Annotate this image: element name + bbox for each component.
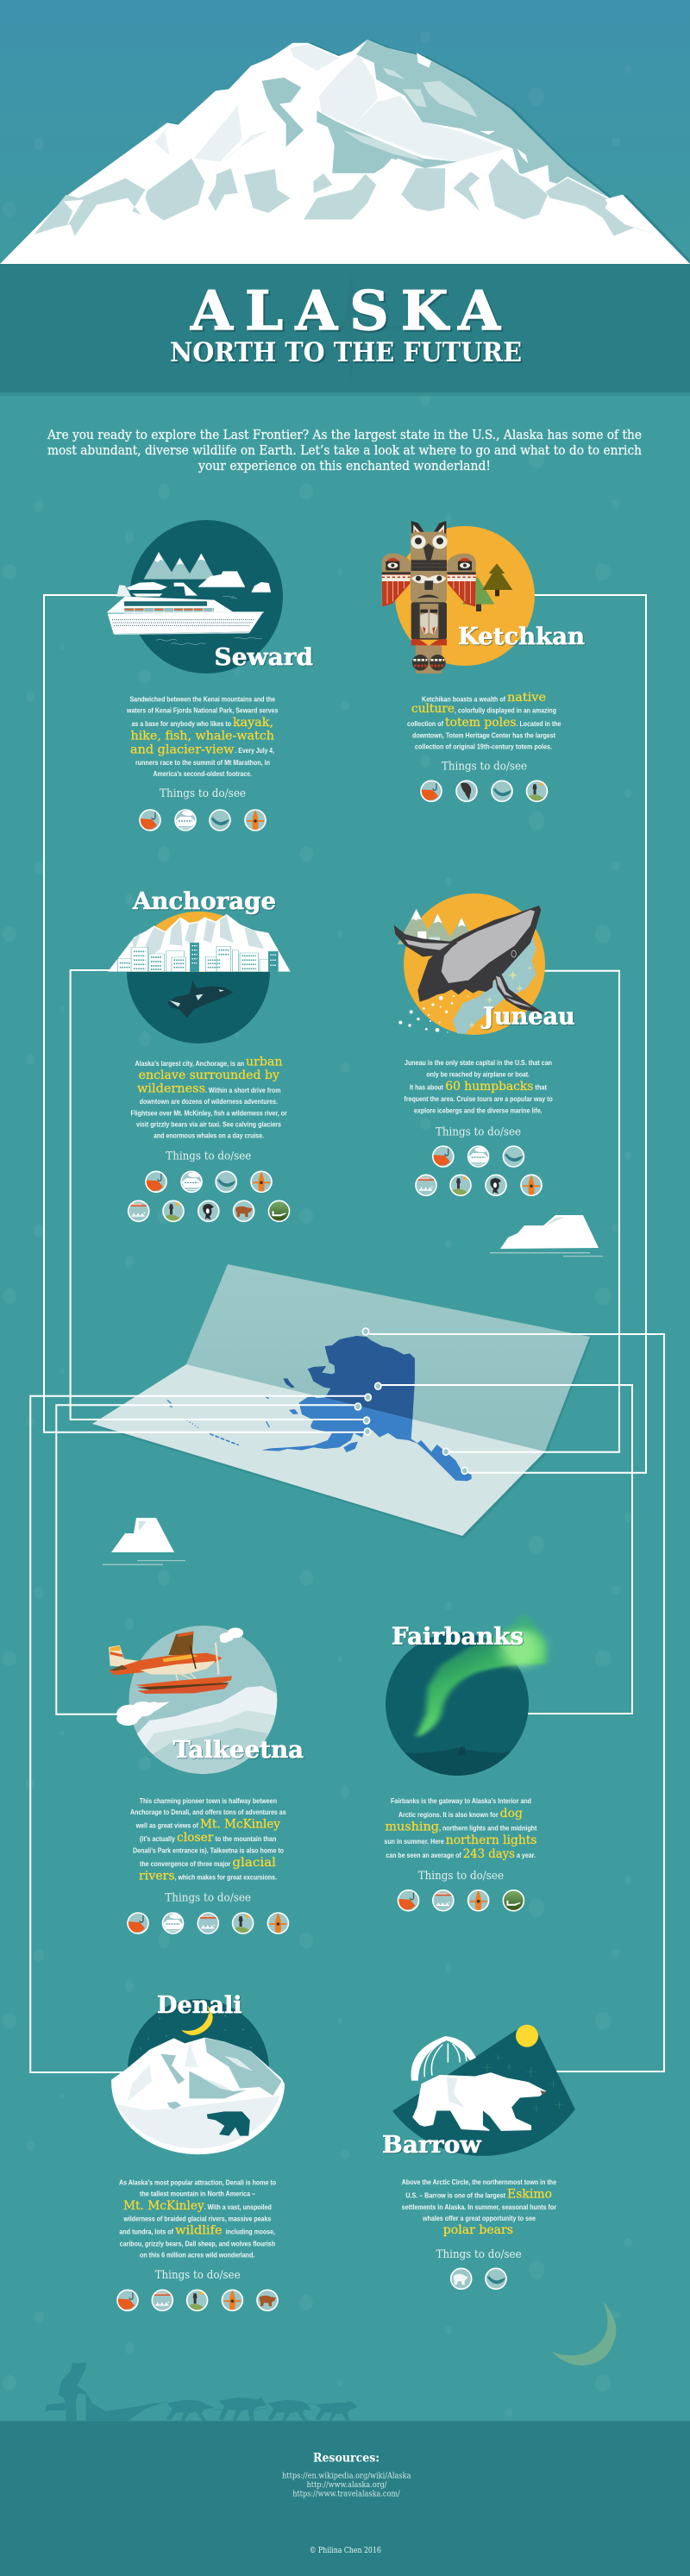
Alaska shape: [167, 1336, 472, 1481]
illustration: northern lights: [386, 1613, 546, 1777]
text block: Seward: as a base for anybody who likes to: [131, 719, 231, 728]
panel: Fairbanks: [384, 1613, 546, 1912]
heading: things to do: Things to do/see: [442, 761, 527, 773]
text block: Ketchikan: totem poles: [445, 716, 516, 730]
text block: Fairbanks: dog: [500, 1807, 523, 1821]
text block: Seward: kayak,: [233, 716, 273, 730]
text block: Seward: America’s second-oldest footrace.: [154, 769, 252, 778]
text block: Talkeetna: rivers: [139, 1870, 175, 1883]
city name: Talkeetna: Talkeetna: [172, 1737, 304, 1764]
text block: Anchorage: . Within a short drive from: [205, 1086, 281, 1094]
text block: Fairbanks: Fairbanks is the gateway to Alaska’s Interior and: [391, 1796, 531, 1805]
heading: things to do: Things to do/see: [160, 787, 246, 800]
text block: Talkeetna: Mt. McKinley: [200, 1817, 280, 1831]
text block: Talkeetna: to the mountain than: [216, 1834, 276, 1843]
icon: compass: [296, 273, 406, 383]
text block: Anchorage: enclave surrounded by: [139, 1069, 279, 1082]
illustration: polar bear: [392, 2025, 575, 2156]
text block: Denali: and tundra, lots of: [119, 2228, 173, 2236]
panel: Barrow: [382, 2025, 575, 2289]
text block: Denali: As Alaska’s most popular attraction, Denali is home to: [119, 2178, 276, 2187]
intro text: most abundant, diverse wildlife on Earth. Let’s take a look at where to go and what to do to enrich: [47, 444, 642, 458]
text block: Denali: [119, 2178, 276, 2259]
text block: Talkeetna: [130, 1796, 286, 1883]
text block: Juneau: [404, 1058, 553, 1114]
icon: iceberg top right: [490, 1215, 603, 1257]
intro text: Are you ready to explore the Last Frontier? As the largest state in the U.S., Alaska has some of the: [47, 429, 642, 442]
resources links: https://en.wikipedia.org/wiki/Alaska: [282, 2472, 411, 2480]
panel: Ketchikan: [382, 521, 585, 801]
text block: Denali: . With a vast, unspoiled: [204, 2203, 272, 2211]
text block: Juneau: only be reached by airplane or boat.: [426, 1069, 530, 1078]
illustration: seaplane: [109, 1626, 282, 1777]
text block: Talkeetna: Anchorage to Denali, and offers tons of adventures as: [130, 1808, 286, 1816]
text block: Seward: waters of Kenai Fjords National Park, Seward serves: [126, 705, 279, 714]
text block: Talkeetna: closer: [177, 1831, 214, 1845]
text block: Barrow: Eskimo: [507, 2187, 552, 2201]
icons: Seward activities: [139, 810, 266, 831]
icons: Talkeetna activities: [127, 1913, 288, 1934]
text block: Barrow: polar bears: [443, 2223, 513, 2237]
panel: Seward: [107, 520, 313, 831]
subtitle: NORTH TO THE FUTURE: [170, 337, 522, 368]
text block: Seward: . Every July 4,: [235, 746, 274, 755]
text block: Fairbanks: [384, 1796, 537, 1861]
text block: Fairbanks: , northern lights and the midnight: [439, 1824, 537, 1833]
text block: Juneau: Juneau is the only state capital in the U.S. that can: [405, 1058, 552, 1067]
icons: Juneau activities: [416, 1146, 542, 1196]
heading: things to do: Things to do/see: [436, 2248, 522, 2261]
text block: Anchorage: and enormous whales on a day cruise.: [154, 1131, 264, 1140]
city name: Ketchkan: Ketchkan: [458, 624, 585, 650]
panel: Anchorage: [108, 888, 291, 1221]
illustration: totem pole: [382, 521, 535, 674]
illustration: humpback whale: [394, 893, 546, 1035]
panel: Talkeetna: [109, 1626, 304, 1934]
text block: Ketchikan: downtown, Totem Heritage Center has the largest: [412, 731, 555, 740]
intro text: [47, 429, 642, 473]
text block: Talkeetna: , which makes for great excursions.: [175, 1873, 277, 1882]
text block: Fairbanks: 243 days: [463, 1847, 515, 1861]
text block: Talkeetna: Denali’s Park entrance is). Talkeetna is also home to: [133, 1846, 284, 1855]
text block: Barrow: settlements in Alaska. In summer, seasonal hunts for: [402, 2203, 557, 2211]
resources links: http://www.alaska.org/: [307, 2481, 387, 2490]
panel: Denali: [111, 1992, 285, 2311]
text block: Barrow: whales offer a great opportunity to see: [422, 2214, 536, 2222]
title band: [0, 264, 690, 396]
header mountain: [0, 40, 690, 264]
heading: things to do: Things to do/see: [436, 1126, 521, 1139]
title: Alaska: ALASKA: [190, 279, 501, 342]
text block: Ketchikan: collection of original 19th-century totem poles.: [415, 742, 552, 750]
text block: Juneau: It has about: [410, 1083, 443, 1092]
text block: Fairbanks: sun in summer. Here: [384, 1837, 444, 1846]
text block: Anchorage: urban: [246, 1056, 283, 1069]
city name: Denali: Denali: [157, 1992, 242, 2019]
panel: Juneau: [394, 893, 575, 1196]
icon: iceberg bottom left: [103, 1518, 185, 1565]
text block: Seward: Sandwiched between the Kenai mountains and the: [129, 695, 275, 704]
text block: Juneau: explore icebergs and the diverse marine life.: [414, 1106, 543, 1114]
text block: Talkeetna: (it’s actually: [140, 1834, 175, 1843]
icons: Anchorage activities: [129, 1171, 290, 1221]
text block: Fairbanks: can be seen an average of: [386, 1851, 461, 1859]
text block: Juneau: 60 humpbacks: [445, 1080, 533, 1094]
icons: Fairbanks activities: [397, 1890, 524, 1912]
icons: Denali activities: [116, 2290, 278, 2311]
heading: things to do: Things to do/see: [165, 1892, 251, 1905]
text block: Fairbanks: Arctic regions. It is also known for: [398, 1810, 499, 1819]
text block: Ketchikan: [407, 691, 561, 750]
text block: Seward: and glacier-view: [130, 743, 235, 756]
text block: Seward: hike, fish, whale-watch: [131, 730, 274, 743]
text block: Denali: caribou, grizzly bears, Dall sheep, and wolves flourish: [120, 2239, 275, 2247]
icons: Ketchikan activities: [420, 780, 547, 801]
illustration: Denali peak and bear: [111, 1999, 285, 2154]
icon: crescent moon: [552, 2301, 616, 2366]
text block: Juneau: that: [535, 1083, 547, 1092]
text block: Barrow: U.S. – Barrow is one of the largest: [405, 2191, 505, 2199]
panel: folded Alaska map: [92, 1264, 592, 1539]
heading: things to do: Things to do/see: [166, 1150, 252, 1163]
text block: Ketchikan: , colorfully displayed in an amazing: [455, 705, 556, 714]
text block: Ketchikan: culture: [411, 702, 455, 716]
text block: Ketchikan: collection of: [407, 719, 443, 728]
intro text: your experience on this enchanted wonderland!: [198, 460, 491, 473]
text block: Fairbanks: a year.: [517, 1851, 536, 1859]
text block: Seward: runners race to the summit of Mt Marathon, in: [135, 758, 270, 767]
connector lines: [30, 595, 664, 2072]
text block: Anchorage: visit grizzly bears via air taxi. See calving glaciers: [136, 1119, 281, 1128]
text block: Denali: Mt. McKinley: [123, 2199, 204, 2213]
text block: Denali: on this 6 million acres wild wonderland.: [140, 2251, 254, 2259]
city name: Barrow: Barrow: [382, 2132, 481, 2159]
text block: Denali: the tallest mountain in North America –: [140, 2190, 255, 2198]
text block: Ketchikan: . Located in the: [516, 719, 561, 728]
city name: Juneau: Juneau: [481, 1003, 575, 1030]
text block: Barrow: [402, 2178, 557, 2237]
copyright: © Philina Chen 2016: [310, 2547, 381, 2555]
dog sled silhouette: [46, 2362, 358, 2422]
text block: Talkeetna: the convergence of three major: [140, 1859, 231, 1868]
text block: Anchorage: wilderness: [137, 1082, 205, 1096]
icons: Barrow activities: [451, 2268, 506, 2289]
text block: Denali: wilderness of braided glacial rivers, massive peaks: [123, 2215, 272, 2223]
city name: Seward: Seward: [214, 644, 313, 671]
map pins: [354, 1328, 467, 1474]
text block: Seward: [126, 695, 279, 778]
city name: Fairbanks: Fairbanks: [392, 1624, 524, 1651]
city name: Anchorage: Anchorage: [132, 888, 276, 915]
heading: things to do: Things to do/see: [155, 2269, 241, 2282]
text block: Ketchikan: Ketchikan boasts a wealth of: [422, 695, 505, 704]
text block: Ketchikan: native: [507, 691, 546, 705]
text block: Talkeetna: This charming pioneer town is halfway between: [140, 1796, 277, 1805]
text block: Talkeetna: glacial: [232, 1856, 277, 1870]
text block: Denali: wildlife: [175, 2224, 223, 2238]
illustration: city and orca: [108, 912, 291, 1044]
text block: Fairbanks: mushing: [385, 1821, 439, 1834]
resources links: [282, 2472, 411, 2498]
heading: things to do: Things to do/see: [418, 1870, 504, 1883]
text block: Juneau: frequent the area. Cruise tours are a popular way to: [404, 1094, 553, 1103]
resources links: https://www.travelalaska.com/: [292, 2490, 401, 2498]
footer band: [0, 2420, 690, 2576]
resources heading: Resources:: [313, 2451, 380, 2465]
text block: Anchorage: [131, 1056, 287, 1140]
text block: Anchorage: downtown are dozens of wilderness adventures.: [140, 1097, 278, 1106]
illustration: cruise ship: [107, 520, 283, 674]
text block: Fairbanks: northern lights: [446, 1833, 536, 1847]
text block: Talkeetna: well as great views of: [135, 1821, 198, 1830]
text block: Anchorage: Alaska’s largest city, Anchorage, is an: [135, 1059, 244, 1068]
text block: Anchorage: Flightsee over Mt. McKinley, fish a wilderness river, or: [131, 1109, 287, 1118]
text block: Denali: including moose,: [226, 2228, 275, 2236]
text block: Barrow: Above the Arctic Circle, the northernmost town in the: [402, 2178, 556, 2186]
